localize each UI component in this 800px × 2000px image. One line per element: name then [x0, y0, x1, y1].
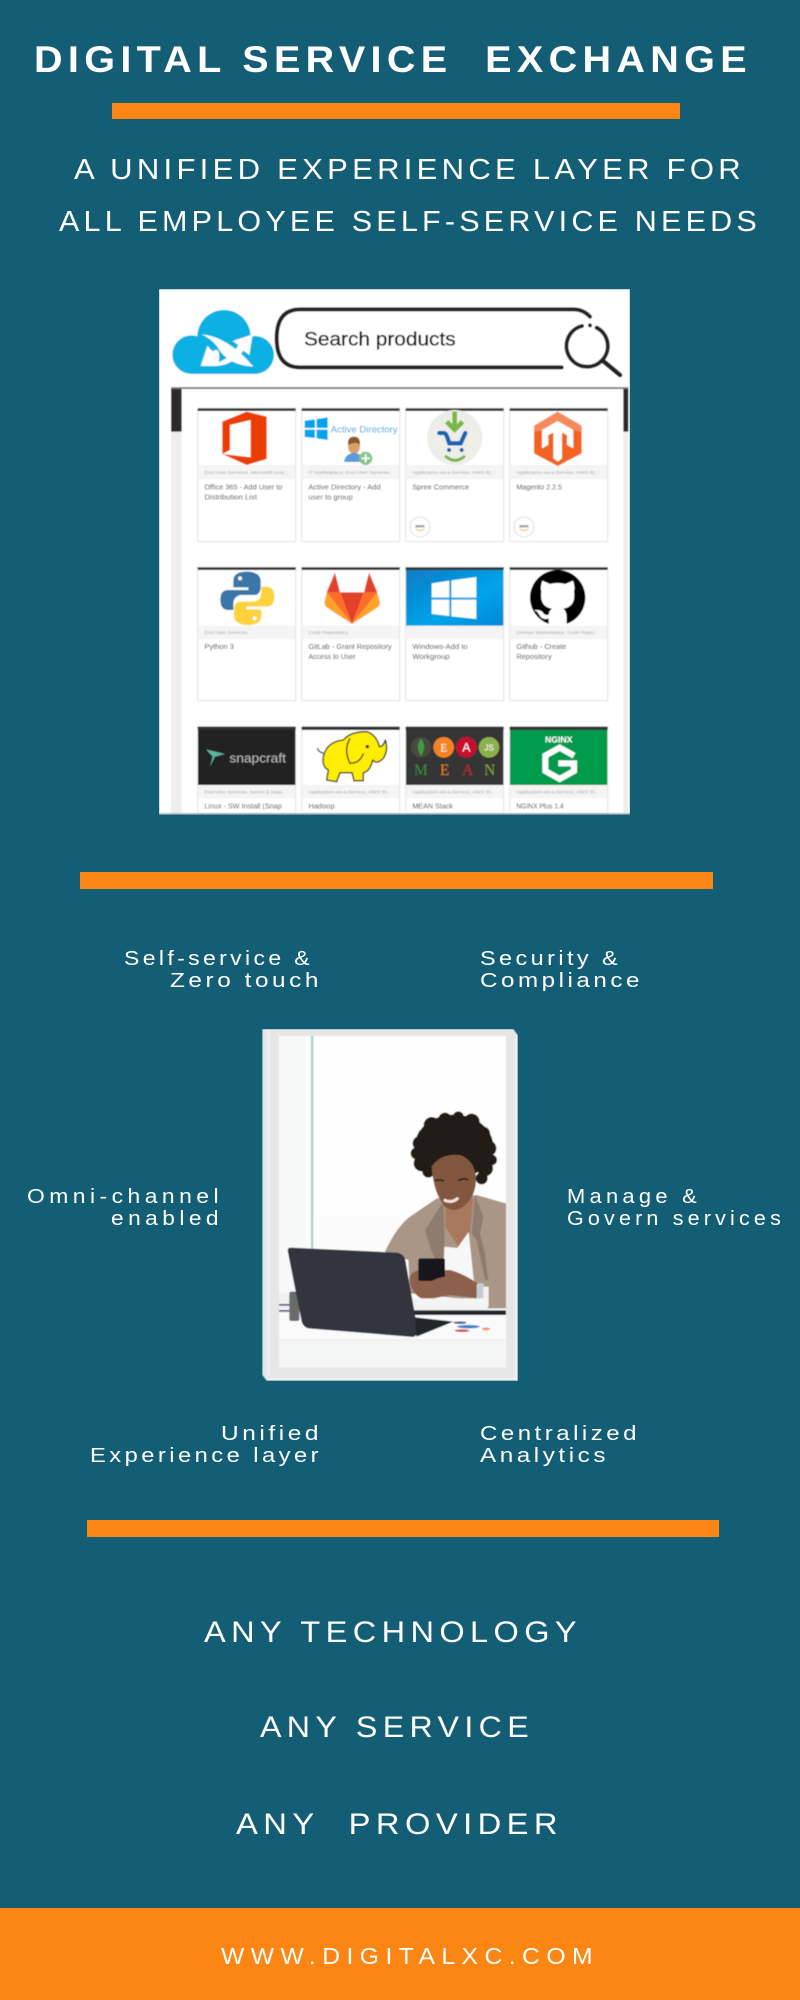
card: Active Directory: IT Marketplace, End User Services, [308, 470, 391, 475]
card: Office 365: Distribution List [204, 494, 257, 501]
card: Office 365 [198, 408, 296, 542]
hair [411, 1111, 497, 1184]
label: security: Compliance [480, 969, 643, 992]
label: self-service: Self-service & [124, 947, 313, 970]
card: Active Directory: user to group [308, 494, 353, 501]
chart on table [453, 1321, 467, 1324]
photo: woman with laptop and phone [262, 1029, 518, 1381]
card: Active Directory: Active Directory [331, 425, 398, 435]
product cards row 1 [198, 408, 608, 542]
card: Windows: Windows-Add to [412, 644, 468, 651]
label: manage [567, 1185, 785, 1230]
card: MEAN Stack: A [462, 741, 470, 755]
card: MEAN Stack: MEAN Stack [412, 804, 454, 811]
card: snapcraft: End User Services, Server & Data... [204, 789, 286, 794]
label: unified experience [90, 1422, 322, 1467]
card: Hadoop: Application-as-a-Service, AWS St... [308, 789, 391, 794]
label: self-service [124, 947, 322, 992]
card: GitHub: Github - Create [516, 644, 566, 651]
pot and papers [279, 1293, 290, 1313]
card: MEAN Stack: E [440, 742, 447, 754]
card: Magento [510, 408, 608, 542]
card: Magento: aws [519, 524, 529, 530]
card: GitHub [510, 567, 608, 701]
label: unified experience: Experience layer [90, 1444, 322, 1467]
jacket [385, 1195, 506, 1308]
product cards row 2 [198, 567, 608, 701]
label: omni-channel [27, 1185, 223, 1230]
card: Magento: Magento 2.2.5 [516, 484, 562, 491]
card: GitHub: Repository [516, 654, 552, 661]
card: MEAN Stack: Application-as-a-Service, AWS St... [412, 789, 495, 794]
card: GitLab: Access to User [308, 654, 356, 661]
card: NGINX: Application-as-a-Service, AWS St... [516, 789, 599, 794]
slogan: any provider: ANY PROVIDER [236, 1808, 563, 1841]
notebook [413, 1298, 488, 1310]
card: Office 365: End User Services, Microsoft Azur... [204, 470, 288, 475]
laptop [288, 1248, 418, 1337]
card: GitLab [302, 567, 400, 701]
chest [445, 1198, 473, 1247]
card: NGINX: NGINX Plus 1.4 [516, 804, 564, 811]
slogan: any technology: ANY TECHNOLOGY [204, 1616, 582, 1649]
card: Office 365: Office 365 - Add User to [204, 484, 282, 491]
label: security: Security & [480, 947, 621, 970]
card: MEAN Stack: N [484, 762, 495, 779]
card: Python 3 [198, 567, 296, 701]
card: Windows [406, 567, 504, 701]
icon: magnifier [566, 324, 620, 375]
label: omni-channel: Omni-channel [27, 1185, 223, 1208]
label: omni-channel: enabled [111, 1207, 223, 1230]
search bar [277, 309, 590, 367]
subtitle: ALL EMPLOYEE SELF-SERVICE NEEDS [59, 206, 761, 238]
label: centralized analytics [480, 1422, 640, 1467]
orange divider top [112, 103, 680, 119]
card: Hadoop [302, 727, 400, 813]
slogan: any service: ANY SERVICE [260, 1711, 534, 1744]
card: Python 3: End User Services, [204, 630, 249, 635]
orange divider middle [80, 872, 713, 889]
card: GitHub: Devops Marketplace, Code Repo... [516, 630, 598, 635]
label: centralized analytics: Analytics [480, 1444, 609, 1467]
subtitle: A UNIFIED EXPERIENCE LAYER FOR [74, 154, 745, 186]
search placeholder: Search products [304, 330, 456, 351]
card: Spree Commerce: Application-as-a-Service, AWS St... [412, 470, 495, 475]
card: GitLab: GitLab - Grant Repository [308, 644, 392, 651]
footer band [0, 1908, 800, 2000]
card: snapcraft: snapcraft [229, 751, 286, 766]
card: NGINX: NGINX [545, 735, 573, 745]
panel: product catalogue screenshot [159, 289, 630, 815]
card: Active Directory: Active Directory - Add [308, 484, 381, 491]
catalogue window [171, 387, 628, 813]
card: Spree Commerce [406, 408, 504, 542]
shirt [443, 1232, 474, 1282]
card: Python 3: Python 3 [204, 644, 234, 651]
card: snapcraft: Linux - SW Install (Snap [204, 804, 282, 811]
card: snapcraft [198, 727, 296, 813]
title: DIGITAL SERVICE EXCHANGE [34, 39, 752, 80]
icon: cloud logo [172, 310, 274, 374]
header: logo and search [172, 309, 620, 375]
card: NGINX [510, 727, 608, 813]
orange divider bottom [87, 1520, 719, 1537]
label: security [480, 947, 643, 992]
label: self-service: Zero touch [170, 969, 322, 992]
card: Hadoop: Hadoop [308, 804, 335, 811]
card: Spree Commerce: Spree Commerce [412, 484, 469, 491]
card: MEAN Stack [406, 727, 504, 813]
face [432, 1155, 476, 1210]
hands [409, 1270, 480, 1300]
card: MEAN Stack: JS [484, 743, 494, 752]
card: MEAN Stack: M [414, 762, 428, 779]
subtitle [59, 154, 761, 238]
label: manage: Govern services [567, 1207, 785, 1230]
card: Active Directory [302, 408, 400, 542]
card: Windows: Workgroup [412, 654, 450, 661]
card: MEAN Stack: E [440, 762, 449, 779]
card: MEAN Stack: A [462, 762, 473, 779]
phone [418, 1258, 445, 1281]
label: centralized analytics: Centralized [480, 1422, 640, 1445]
card: GitLab: Code Repository, [308, 630, 349, 635]
card: Magento: Application-as-a-Service, AWS St... [516, 470, 599, 475]
footer url: WWW.DIGITALXC.COM [221, 1943, 599, 1969]
watch [477, 1283, 484, 1301]
card: Spree Commerce: aws [415, 524, 425, 530]
label: unified experience: Unified [221, 1422, 322, 1445]
product cards row 3 [159, 727, 630, 815]
label: manage: Manage & [567, 1185, 701, 1208]
